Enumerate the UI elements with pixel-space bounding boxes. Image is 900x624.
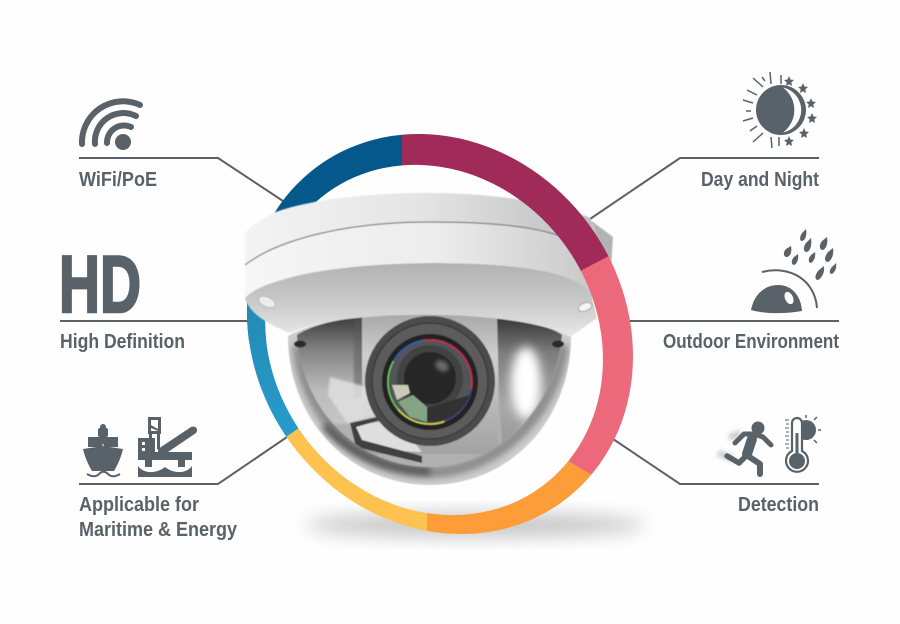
label: Detection: Detection <box>738 494 819 516</box>
stars <box>784 76 817 146</box>
housing seam <box>245 222 570 265</box>
housing upper band <box>245 193 598 265</box>
ring: segments behind camera <box>247 134 633 534</box>
icon: runner and thermometer <box>718 415 821 474</box>
icon: rain on dome <box>751 229 836 313</box>
icon: HD: HD <box>59 240 141 330</box>
dome mount right <box>552 340 564 348</box>
icon: sun and moon <box>743 72 817 148</box>
screw left <box>257 294 277 310</box>
label: Day and Night: Day and Night <box>701 169 819 191</box>
label: WiFi/PoE: WiFi/PoE <box>79 169 157 191</box>
label: High Definition: High Definition <box>60 331 185 353</box>
camera <box>245 193 613 485</box>
dome <box>285 310 575 485</box>
lens colour ring <box>388 340 472 424</box>
lens lower shade <box>427 395 470 422</box>
housing skirt <box>245 263 597 337</box>
dome interior <box>296 314 562 468</box>
dome outer band <box>288 313 571 485</box>
connector lines <box>60 158 839 484</box>
ring: segments over camera <box>402 134 633 475</box>
label: Applicable for Maritime and Energy: Applicable for <box>79 494 199 516</box>
label: Applicable for Maritime and Energy <box>79 494 238 541</box>
ship <box>83 424 123 476</box>
screw right <box>577 301 593 313</box>
camera housing back edge <box>585 216 613 300</box>
oil rig <box>138 417 197 477</box>
runner <box>727 422 771 474</box>
runner motion blur <box>718 433 741 459</box>
dome mount left <box>294 340 306 348</box>
lens reflection green <box>398 395 427 422</box>
icon: ship and rig <box>83 417 197 477</box>
housing band <box>245 193 598 298</box>
label: Outdoor Environment: Outdoor Environment <box>663 331 839 353</box>
ground shadow <box>305 513 645 537</box>
lens <box>365 316 495 446</box>
lens reflection pale <box>392 385 410 400</box>
icon: wifi <box>82 101 140 150</box>
label: Applicable for Maritime and Energy: Maritime & Energy <box>79 519 238 541</box>
thermometer <box>785 415 821 472</box>
